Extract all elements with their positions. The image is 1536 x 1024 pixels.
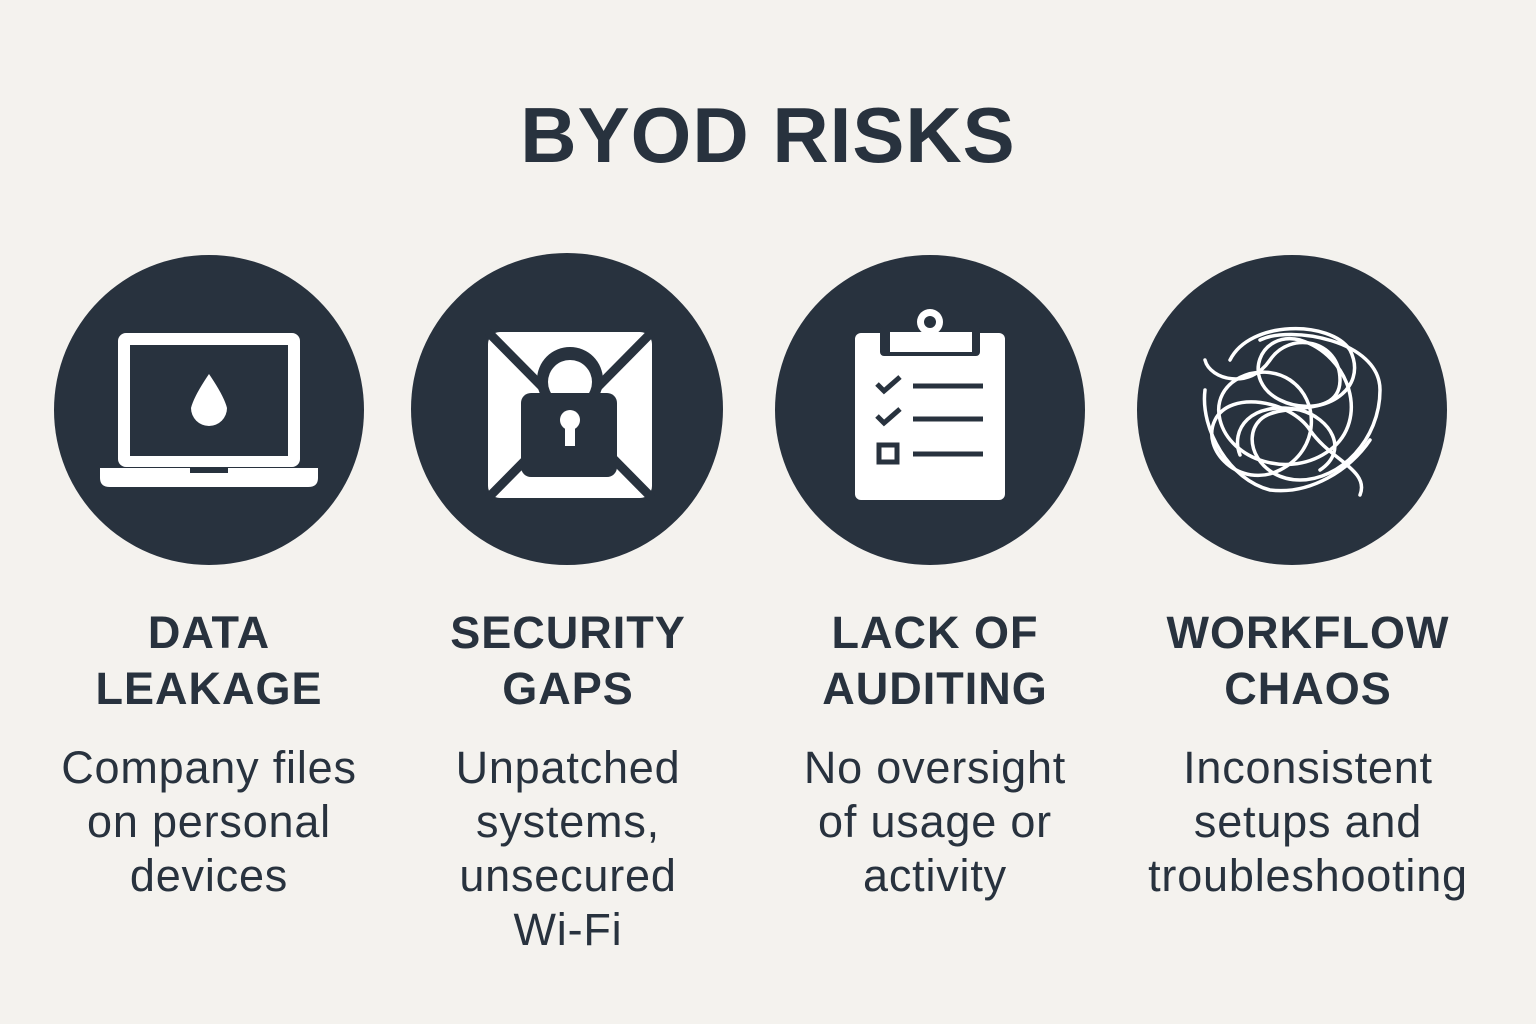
text: workflow chaos description: troubleshooting — [1148, 850, 1468, 901]
title: BYOD RISKS — [520, 91, 1016, 179]
heading: data leakage: LEAKAGE — [95, 663, 322, 714]
heading: security gaps: GAPS — [502, 663, 634, 714]
text: data leakage description — [61, 742, 357, 901]
text: workflow chaos description: setups and — [1194, 796, 1422, 847]
text: security gaps description: unsecured — [459, 850, 677, 901]
heading: data leakage: DATA — [148, 607, 270, 658]
icon: laptop with data drop — [54, 255, 364, 565]
heading: security gaps: SECURITY — [450, 607, 686, 658]
heading: data leakage — [95, 607, 322, 714]
text: workflow chaos description: Inconsistent — [1183, 742, 1433, 793]
text: data leakage description: Company files — [61, 742, 357, 793]
text: security gaps description: systems, — [476, 796, 660, 847]
column: data leakage — [61, 607, 357, 901]
text: lack of auditing description: of usage or — [818, 796, 1052, 847]
text: lack of auditing description: No oversight — [804, 742, 1066, 793]
text: security gaps description — [456, 742, 680, 955]
heading: security gaps — [450, 607, 686, 714]
icon: clipboard checklist — [775, 255, 1085, 565]
column: security gaps — [450, 607, 686, 955]
column: workflow chaos — [1148, 607, 1468, 901]
text: lack of auditing description: activity — [863, 850, 1007, 901]
text: workflow chaos description — [1148, 742, 1468, 901]
heading: workflow chaos — [1166, 607, 1449, 714]
icon: padlock security gap — [411, 253, 723, 565]
text: security gaps description: Wi-Fi — [514, 904, 622, 955]
heading: lack of auditing — [822, 607, 1048, 714]
column: lack of auditing — [804, 607, 1066, 901]
heading: workflow chaos: WORKFLOW — [1167, 607, 1449, 658]
heading: lack of auditing: AUDITING — [822, 663, 1048, 714]
heading: workflow chaos: CHAOS — [1224, 663, 1392, 714]
text: lack of auditing description — [804, 742, 1066, 901]
text: data leakage description: devices — [130, 850, 288, 901]
text: security gaps description: Unpatched — [456, 742, 680, 793]
icon: tangled scribble — [1137, 255, 1447, 565]
heading: lack of auditing: LACK OF — [832, 607, 1038, 658]
text: data leakage description: on personal — [87, 796, 331, 847]
